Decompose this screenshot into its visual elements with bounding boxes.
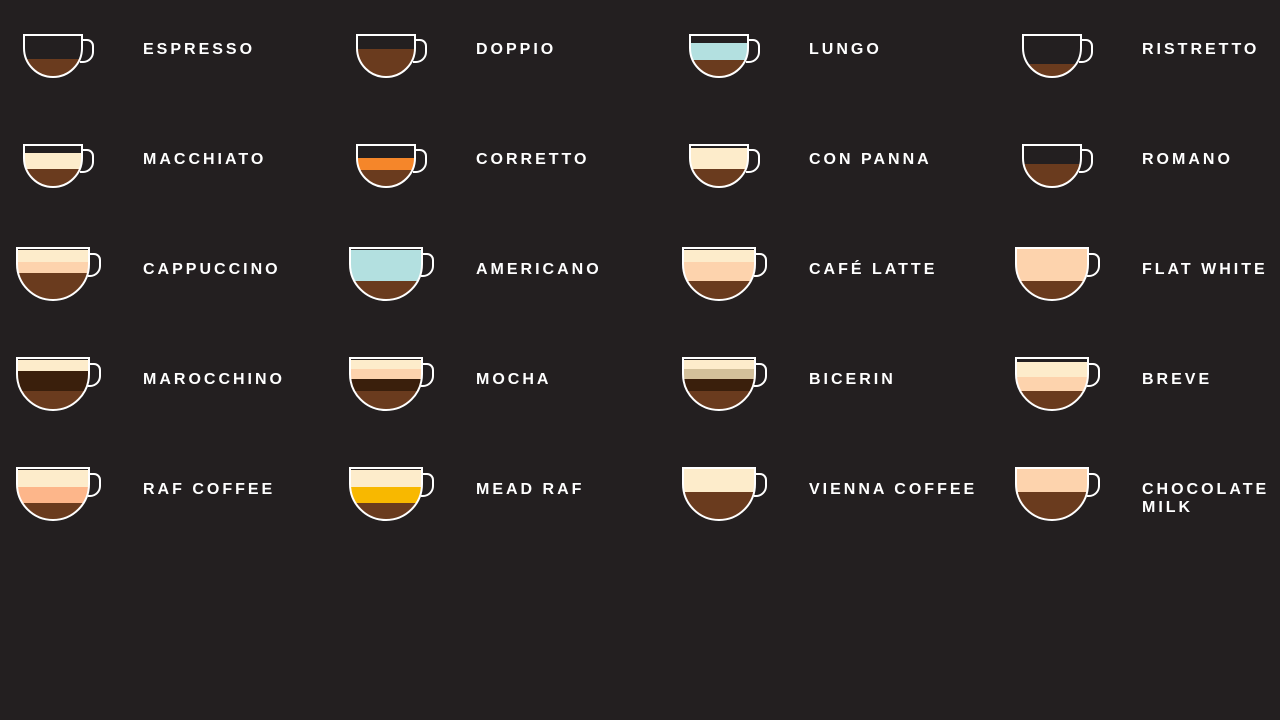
item: romano [1022,144,1230,188]
item: breve: BREVE [1142,371,1212,388]
item: mead raf [349,467,581,521]
item: con panna [689,144,928,188]
item: corretto: CORRETTO [476,151,589,168]
item: doppio [356,34,552,78]
item: flat white [1015,247,1264,301]
item: bicerin [682,357,892,411]
item: bicerin: BICERIN [809,371,896,388]
item: raf coffee: RAF COFFEE [143,481,275,498]
item: cappuccino: CAPPUCCINO [143,261,281,278]
item: americano [349,247,598,301]
item: cappuccino [16,247,277,301]
item: vienna coffee [682,467,974,521]
item: macchiato [23,144,263,188]
item: ristretto: RISTRETTO [1142,41,1259,58]
item: ristretto [1022,34,1256,78]
item: lungo: LUNGO [809,41,882,58]
item: corretto [356,144,586,188]
item: espresso: ESPRESSO [143,41,255,58]
item: lungo [689,34,878,78]
item: flat white: FLAT WHITE [1142,261,1268,278]
item: marocchino [16,357,282,411]
item: mead raf: MEAD RAF [476,481,584,498]
item: mocha: MOCHA [476,371,551,388]
item: chocolate milk: CHOCOLATE [1142,481,1269,498]
item: americano: AMERICANO [476,261,602,278]
item: cafe latte [682,247,934,301]
item: romano: ROMANO [1142,151,1233,168]
item: espresso [23,34,252,78]
item: raf coffee [16,467,272,521]
item: cafe latte: CAFÉ LATTE [809,259,937,278]
item: vienna coffee: VIENNA COFFEE [809,481,977,498]
item: doppio: DOPPIO [476,41,556,58]
item: con panna: CON PANNA [809,151,932,168]
item: breve [1015,357,1209,411]
item: chocolate milk: MILK [1142,499,1193,516]
item: mocha [349,357,548,411]
item: chocolate milk [1015,467,1266,521]
item: marocchino: MAROCCHINO [143,371,285,388]
item: macchiato: MACCHIATO [143,151,266,168]
